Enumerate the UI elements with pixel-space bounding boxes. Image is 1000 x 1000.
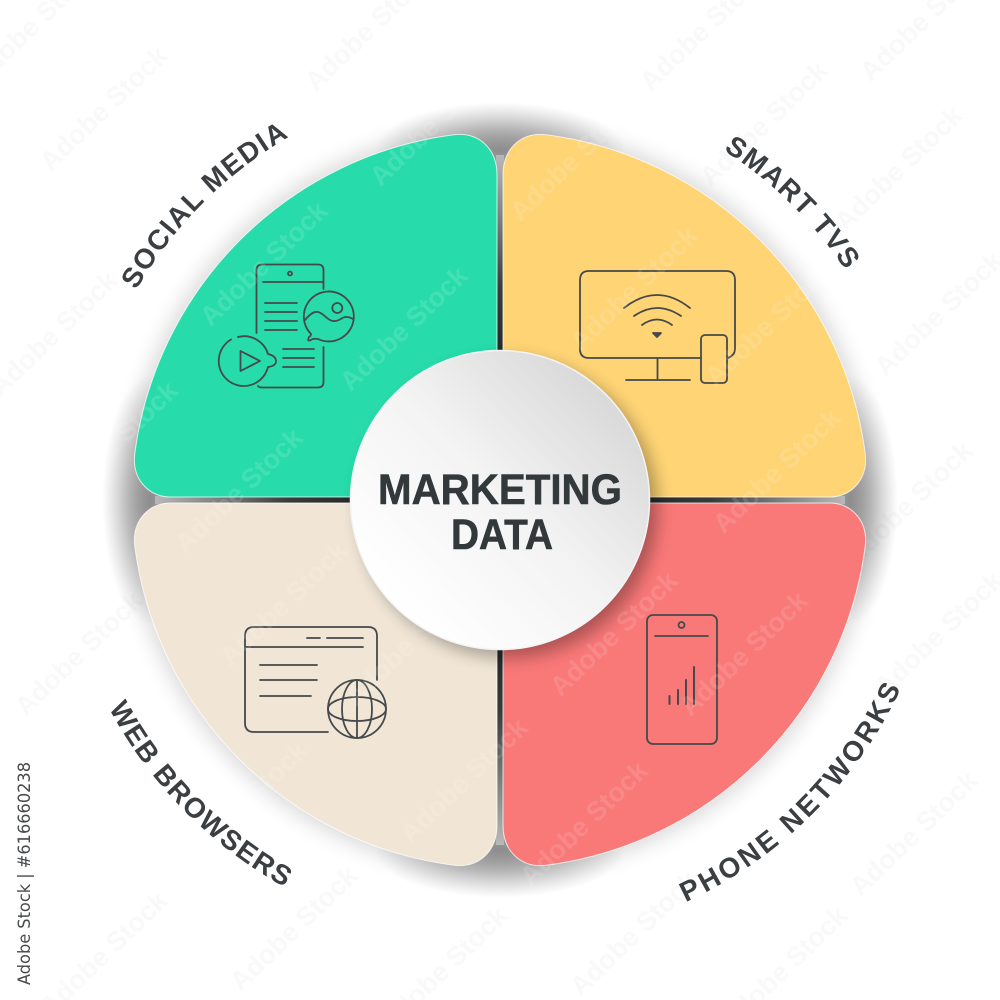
- center title: DATA: [451, 511, 553, 559]
- watermark on quadrants: Adobe Stock: [707, 402, 847, 539]
- icon: smartphone with signal bars: [647, 615, 717, 744]
- label: social media: SOCIAL MEDIA: [122, 124, 288, 288]
- icon: social media phone with bubbles: [219, 264, 354, 388]
- watermark on quadrants: Adobe Stock: [364, 55, 504, 192]
- soft shadow behind the pie: [102, 102, 898, 898]
- watermark on background: Adobe Stock: [694, 55, 834, 192]
- watermark on quadrants: Adobe Stock: [514, 755, 654, 892]
- icon: browser window with globe: [245, 627, 386, 738]
- watermark on background: Adobe Stock: [839, 435, 979, 572]
- watermark on quadrants: Adobe Stock: [174, 735, 314, 872]
- center circle shadow: [358, 358, 658, 658]
- panel: social media quadrant: [134, 134, 497, 497]
- watermark on quadrants: Adobe Stock: [334, 260, 474, 397]
- panel: phone networks quadrant: [503, 503, 866, 866]
- watermark on quadrants: Adobe Stock: [674, 585, 814, 722]
- center title: [378, 466, 622, 559]
- label: web browsers: WEB BROWSERS: [111, 698, 292, 885]
- watermark on quadrants: Adobe Stock: [564, 220, 704, 357]
- center circle: [350, 350, 650, 650]
- center title: MARKETING: [378, 466, 622, 514]
- watermark on quadrants: Adobe Stock: [394, 712, 534, 849]
- watermark on background: Adobe Stock: [224, 860, 364, 997]
- label: phone networks: PHONE NETWORKS: [678, 683, 899, 902]
- panel: smart TVs quadrant: [503, 134, 866, 497]
- panel: web browsers quadrant: [134, 503, 497, 866]
- watermark on quadrants: Adobe Stock: [504, 90, 644, 227]
- watermark on background: Adobe Stock: [9, 585, 149, 722]
- watermark on quadrants: Adobe Stock: [699, 255, 839, 392]
- icon: smart TV with wifi and phone: [580, 271, 735, 383]
- watermark on quadrants: Adobe Stock: [44, 375, 184, 512]
- watermark on quadrants: Adobe Stock: [169, 422, 309, 559]
- watermark on quadrants: Adobe Stock: [214, 535, 354, 672]
- stock id caption: Adobe Stock | #616660238: [15, 762, 35, 985]
- watermark on quadrants: [44, 55, 847, 892]
- watermark on background: Adobe Stock: [564, 865, 704, 1000]
- watermark on background: Adobe Stock: [34, 40, 174, 177]
- dark gaps between quadrants: [155, 155, 845, 845]
- watermark on quadrants: Adobe Stock: [194, 195, 334, 332]
- watermark on background: Adobe Stock: [844, 765, 984, 902]
- watermark on background: Adobe Stock: [829, 100, 969, 237]
- watermark on quadrants: Adobe Stock: [544, 565, 684, 702]
- watermark on quadrants: Adobe Stock: [339, 575, 479, 712]
- label: smart TVs: SMART TVS: [726, 137, 858, 268]
